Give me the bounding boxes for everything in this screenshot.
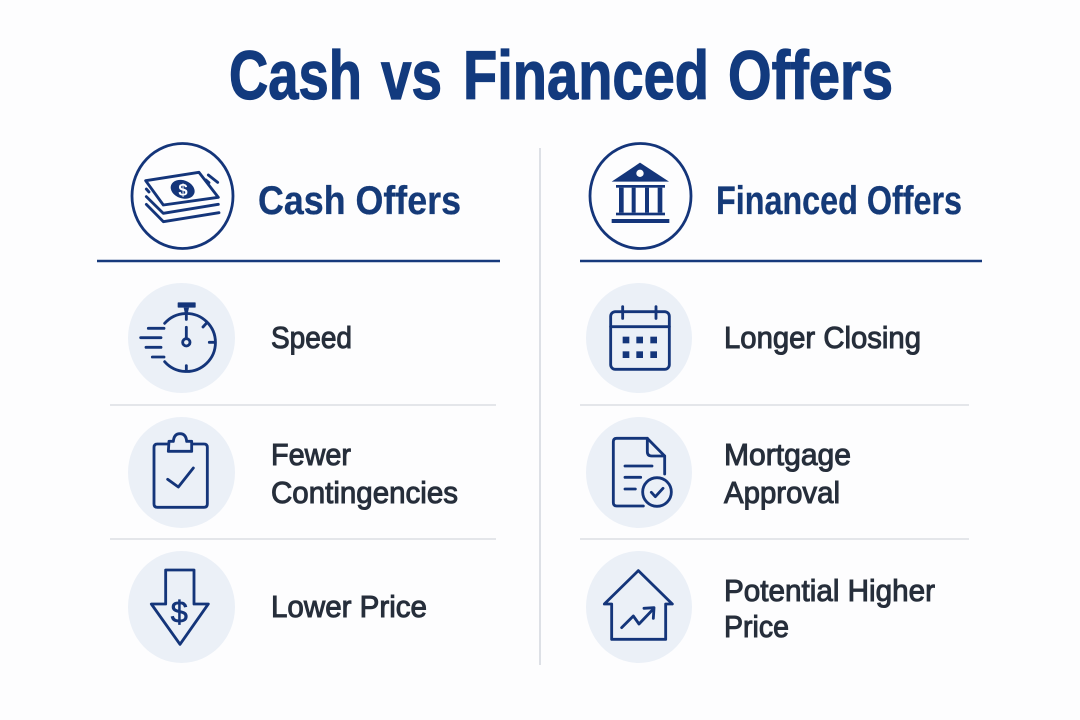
title: Cash bbox=[229, 37, 362, 114]
row: lower price bbox=[128, 551, 427, 663]
financed offers header bbox=[590, 144, 962, 248]
heading: cash offers: Cash Offers bbox=[258, 179, 461, 223]
row: potential higher price bbox=[586, 551, 935, 663]
label: speed: Speed bbox=[271, 320, 352, 355]
header rule bbox=[580, 260, 982, 262]
heading: financed offers: Financed Offers bbox=[716, 179, 962, 223]
label: mortgage approval bbox=[724, 437, 851, 510]
icon: stopwatch bbox=[128, 283, 235, 393]
icon: down arrow dollar bbox=[128, 551, 235, 663]
label: mortgage approval: Mortgage bbox=[724, 437, 851, 472]
label: longer closing: Longer Closing bbox=[724, 320, 921, 355]
icon: down arrow dollar: $ bbox=[171, 596, 188, 630]
row: mortgage approval bbox=[586, 417, 851, 528]
icon: bank bbox=[590, 144, 691, 248]
icon: approved document bbox=[586, 417, 692, 528]
row: speed bbox=[128, 283, 352, 393]
center divider bbox=[539, 148, 541, 665]
icon: cash stack bbox=[132, 144, 233, 248]
icon: calendar bbox=[586, 283, 692, 393]
label: potential higher price: Potential Higher bbox=[724, 573, 935, 608]
header rule bbox=[97, 260, 500, 262]
icon: house with rising chart bbox=[586, 551, 692, 663]
label: mortgage approval: Approval bbox=[724, 475, 840, 510]
title: Offers bbox=[728, 37, 893, 114]
icon: clipboard check bbox=[128, 417, 235, 528]
title bbox=[229, 37, 893, 114]
title: vs bbox=[381, 37, 442, 114]
icon: cash stack: $ bbox=[178, 180, 188, 199]
label: lower price: Lower Price bbox=[271, 589, 427, 624]
row: fewer contingencies bbox=[128, 417, 458, 528]
label: potential higher price: Price bbox=[724, 609, 789, 644]
label: fewer contingencies bbox=[271, 437, 458, 510]
title: Financed bbox=[463, 37, 709, 114]
label: fewer contingencies: Contingencies bbox=[271, 475, 458, 510]
panel: cash offers bbox=[97, 144, 500, 663]
cash offers header bbox=[132, 144, 461, 248]
row: longer closing bbox=[586, 283, 921, 393]
label: fewer contingencies: Fewer bbox=[271, 437, 351, 472]
label: potential higher price bbox=[724, 573, 935, 644]
panel: financed offers bbox=[580, 144, 982, 663]
